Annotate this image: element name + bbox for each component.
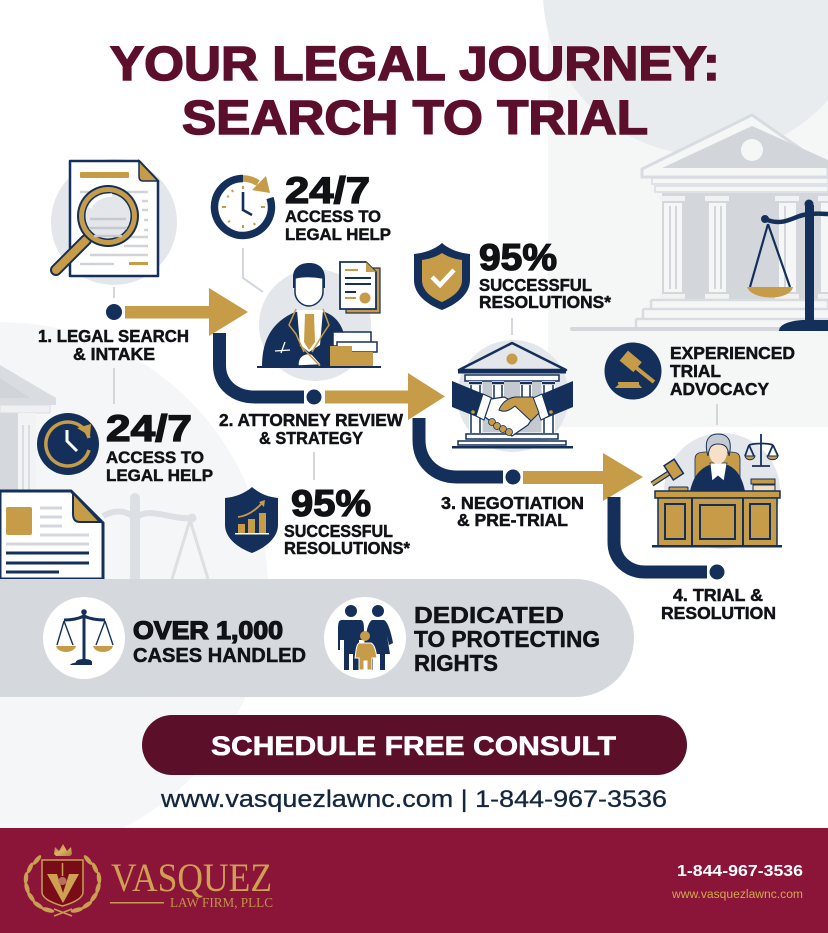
label: step 2: 2. ATTORNEY REVIEW [219,410,403,430]
label: step 3: 3. NEGOTIATION [441,493,584,513]
stat: dedicated to protecting rights: TO PROTECTING [414,626,600,652]
label: step 4: 4. TRIAL & [673,585,763,605]
title [110,38,720,145]
stat: dedicated to protecting rights: RIGHTS [414,650,498,676]
path: step 1 to step 2 [220,333,304,397]
logo wordmark: LAW FIRM, PLLC [170,896,273,911]
icon: shield with check [414,243,470,310]
stat: dedicated to protecting rights [414,602,600,676]
stat: experienced trial advocacy [670,343,795,399]
connector: clock to attorney [243,248,263,292]
label: step 3 [441,493,584,530]
stat: 95% resolutions upper: 95% [479,237,557,278]
icon: courthouse and handshake [452,340,573,452]
stat: 24/7 access top [285,170,391,244]
label: step 1: & INTAKE [73,344,155,364]
step 4 marker dot [708,564,726,580]
stat: experienced trial advocacy: EXPERIENCED [670,343,795,363]
stat: over 1,000 cases handled: CASES HANDLED [133,644,306,667]
path: step 3 to step 4 [614,497,707,572]
stat: 95% resolutions upper [479,237,611,312]
title: SEARCH TO TRIAL [182,92,648,145]
step 1 marker dot [106,304,122,320]
stat: over 1,000 cases handled [133,617,306,667]
stat: 24/7 access top: ACCESS TO [285,207,381,226]
stat: 24/7 access top: 24/7 [285,170,370,211]
label: step 2 [219,410,403,448]
stat: 95% resolutions upper: SUCCESSFUL [479,275,592,295]
icon: document corner [0,491,103,579]
title: YOUR LEGAL JOURNEY: [110,38,720,91]
background illustration: faint scales [103,493,208,579]
stat: over 1,000 cases handled: OVER 1,000 [133,617,283,645]
background illustration: left courthouse [0,365,56,490]
step 2 marker dot [306,388,322,406]
icon: family badge [324,597,406,679]
stat: experienced trial advocacy: ADVOCACY [670,379,769,399]
button: schedule free consult: SCHEDULE FREE CONSULT [211,731,617,761]
stat: 24/7 access left [106,408,213,485]
footer contact [671,863,803,901]
label: step 3: & PRE-TRIAL [457,510,568,530]
background illustration: courthouse and scales [570,115,828,331]
stat: experienced trial advocacy: TRIAL [670,361,721,381]
panel: credentials band [0,579,634,697]
icon: navy clock badge [37,413,99,475]
footer band [0,828,828,933]
icon: attorney at desk [257,262,381,381]
icon: scales badge [43,597,125,679]
icon: clock with gold arrow [214,176,272,236]
icon: shield with growth chart [225,487,278,553]
button: schedule free consult [142,715,687,775]
connector: shield to handshake [511,318,513,335]
icon: document with magnifying glass [51,159,177,285]
connector: gavel to judge [716,404,718,425]
stat: 24/7 access left: LEGAL HELP [106,466,213,485]
stat: 24/7 access left: ACCESS TO [106,448,204,467]
contact line: www.vasquezlawnc.com | 1-844-967-3536 [160,786,667,813]
stat: 95% resolutions upper: RESOLUTIONS* [479,292,611,312]
label: step 2: & STRATEGY [259,428,363,448]
stat: dedicated to protecting rights: DEDICATED [414,602,564,628]
logo wordmark: VASQUEZ [111,855,272,900]
label: step 4: RESOLUTION [661,603,776,623]
arrow: step 2 to step 3 [325,373,445,420]
connector: step 1 [113,287,115,404]
label: step 1: 1. LEGAL SEARCH [38,326,189,346]
stat: 24/7 access left: 24/7 [106,408,192,449]
step 3 marker dot [504,468,522,486]
stat: 24/7 access top: LEGAL HELP [285,225,391,244]
path: step 2 to step 3 [419,418,503,477]
stat: 95% resolutions lower: 95% [291,483,371,524]
label: step 4 [661,585,776,623]
stat: 95% resolutions lower: RESOLUTIONS* [284,538,410,558]
label: step 1 [38,326,189,364]
footer contact: www.vasquezlawnc.com [671,889,803,901]
connector: step 2 [313,452,315,480]
footer contact: 1-844-967-3536 [677,863,803,880]
large navy and gold scales [747,200,828,331]
stat: 95% resolutions lower [284,483,410,558]
stat: 95% resolutions lower: SUCCESSFUL [284,521,393,541]
logo: vasquez law firm crest [23,844,102,916]
arrow: step 1 to step 2 [125,288,248,336]
icon: gavel badge [604,342,662,400]
arrow: step 3 to step 4 [523,453,643,501]
icon: judge at bench [652,433,782,549]
